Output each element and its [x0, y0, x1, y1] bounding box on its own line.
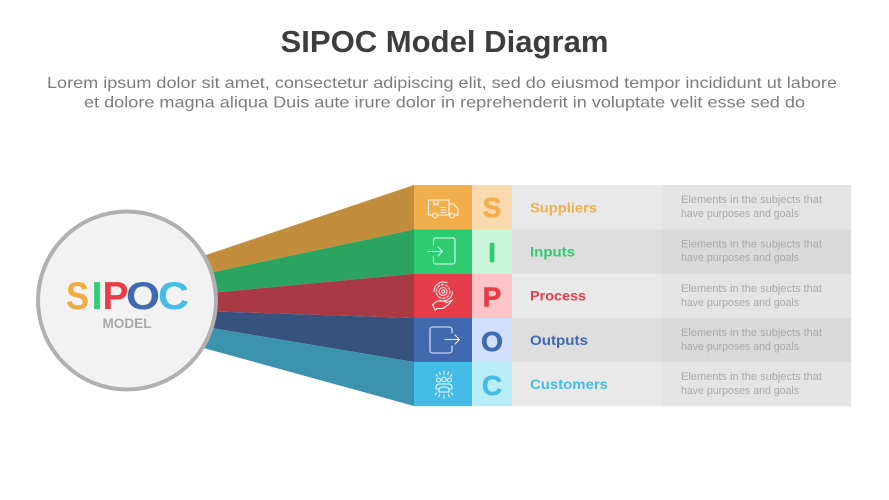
row: Suppliers: S	[483, 192, 501, 223]
circle word MODEL: MODEL	[102, 315, 152, 331]
row: Process: have purposes and goals	[681, 297, 799, 309]
row: Inputs: I	[488, 237, 496, 268]
row: Customers: C	[482, 370, 502, 401]
row: Outputs	[414, 318, 851, 362]
icon: output arrow	[430, 327, 460, 353]
row: Outputs: Elements in the subjects that	[681, 327, 822, 339]
row: Outputs: have purposes and goals	[681, 341, 799, 353]
row: Process: P	[483, 282, 501, 312]
row: Inputs: have purposes and goals	[681, 252, 799, 264]
row: Customers: Customers	[530, 376, 608, 392]
row: Outputs: O	[481, 326, 503, 357]
row: Inputs: Inputs	[530, 244, 575, 260]
row: Outputs: Outputs	[530, 332, 588, 348]
circle word SIPOC: S	[66, 275, 89, 318]
circle badge	[38, 212, 216, 390]
icon: process gear in hand	[432, 282, 452, 310]
subtitle text: Lorem ipsum dolor sit amet, consectetur adipiscing elit, sed do eiusmod tempor incididunt ut labore	[47, 75, 837, 92]
subtitle text: et dolore magna aliqua Duis aute irure dolor in reprehenderit in voluptate velit esse sed do	[84, 94, 805, 112]
row: Process	[414, 274, 851, 318]
icon: truck	[428, 200, 458, 218]
circle word SIPOC: I	[92, 275, 102, 318]
row: Suppliers: Elements in the subjects that	[681, 194, 822, 206]
row: Customers: Elements in the subjects that	[681, 371, 822, 383]
row: Suppliers: Suppliers	[530, 200, 597, 216]
icon: input arrow	[428, 238, 455, 264]
subtitle text	[47, 75, 837, 112]
row: Customers: have purposes and goals	[681, 385, 799, 397]
circle word SIPOC	[66, 275, 189, 318]
title: SIPOC Model Diagram	[280, 24, 608, 59]
circle word SIPOC: C	[158, 275, 189, 318]
row: Process: Elements in the subjects that	[681, 283, 822, 295]
row: Process: Process	[530, 288, 586, 304]
row: Suppliers	[414, 185, 851, 230]
row: Inputs: Elements in the subjects that	[681, 238, 822, 250]
icon: customers group	[435, 371, 453, 398]
circle word SIPOC: P	[102, 275, 128, 318]
circle word SIPOC: O	[126, 275, 160, 318]
row: Customers	[414, 362, 851, 406]
row: Suppliers: have purposes and goals	[681, 208, 799, 220]
funnel wedges	[200, 185, 414, 406]
row: Inputs	[414, 230, 851, 274]
